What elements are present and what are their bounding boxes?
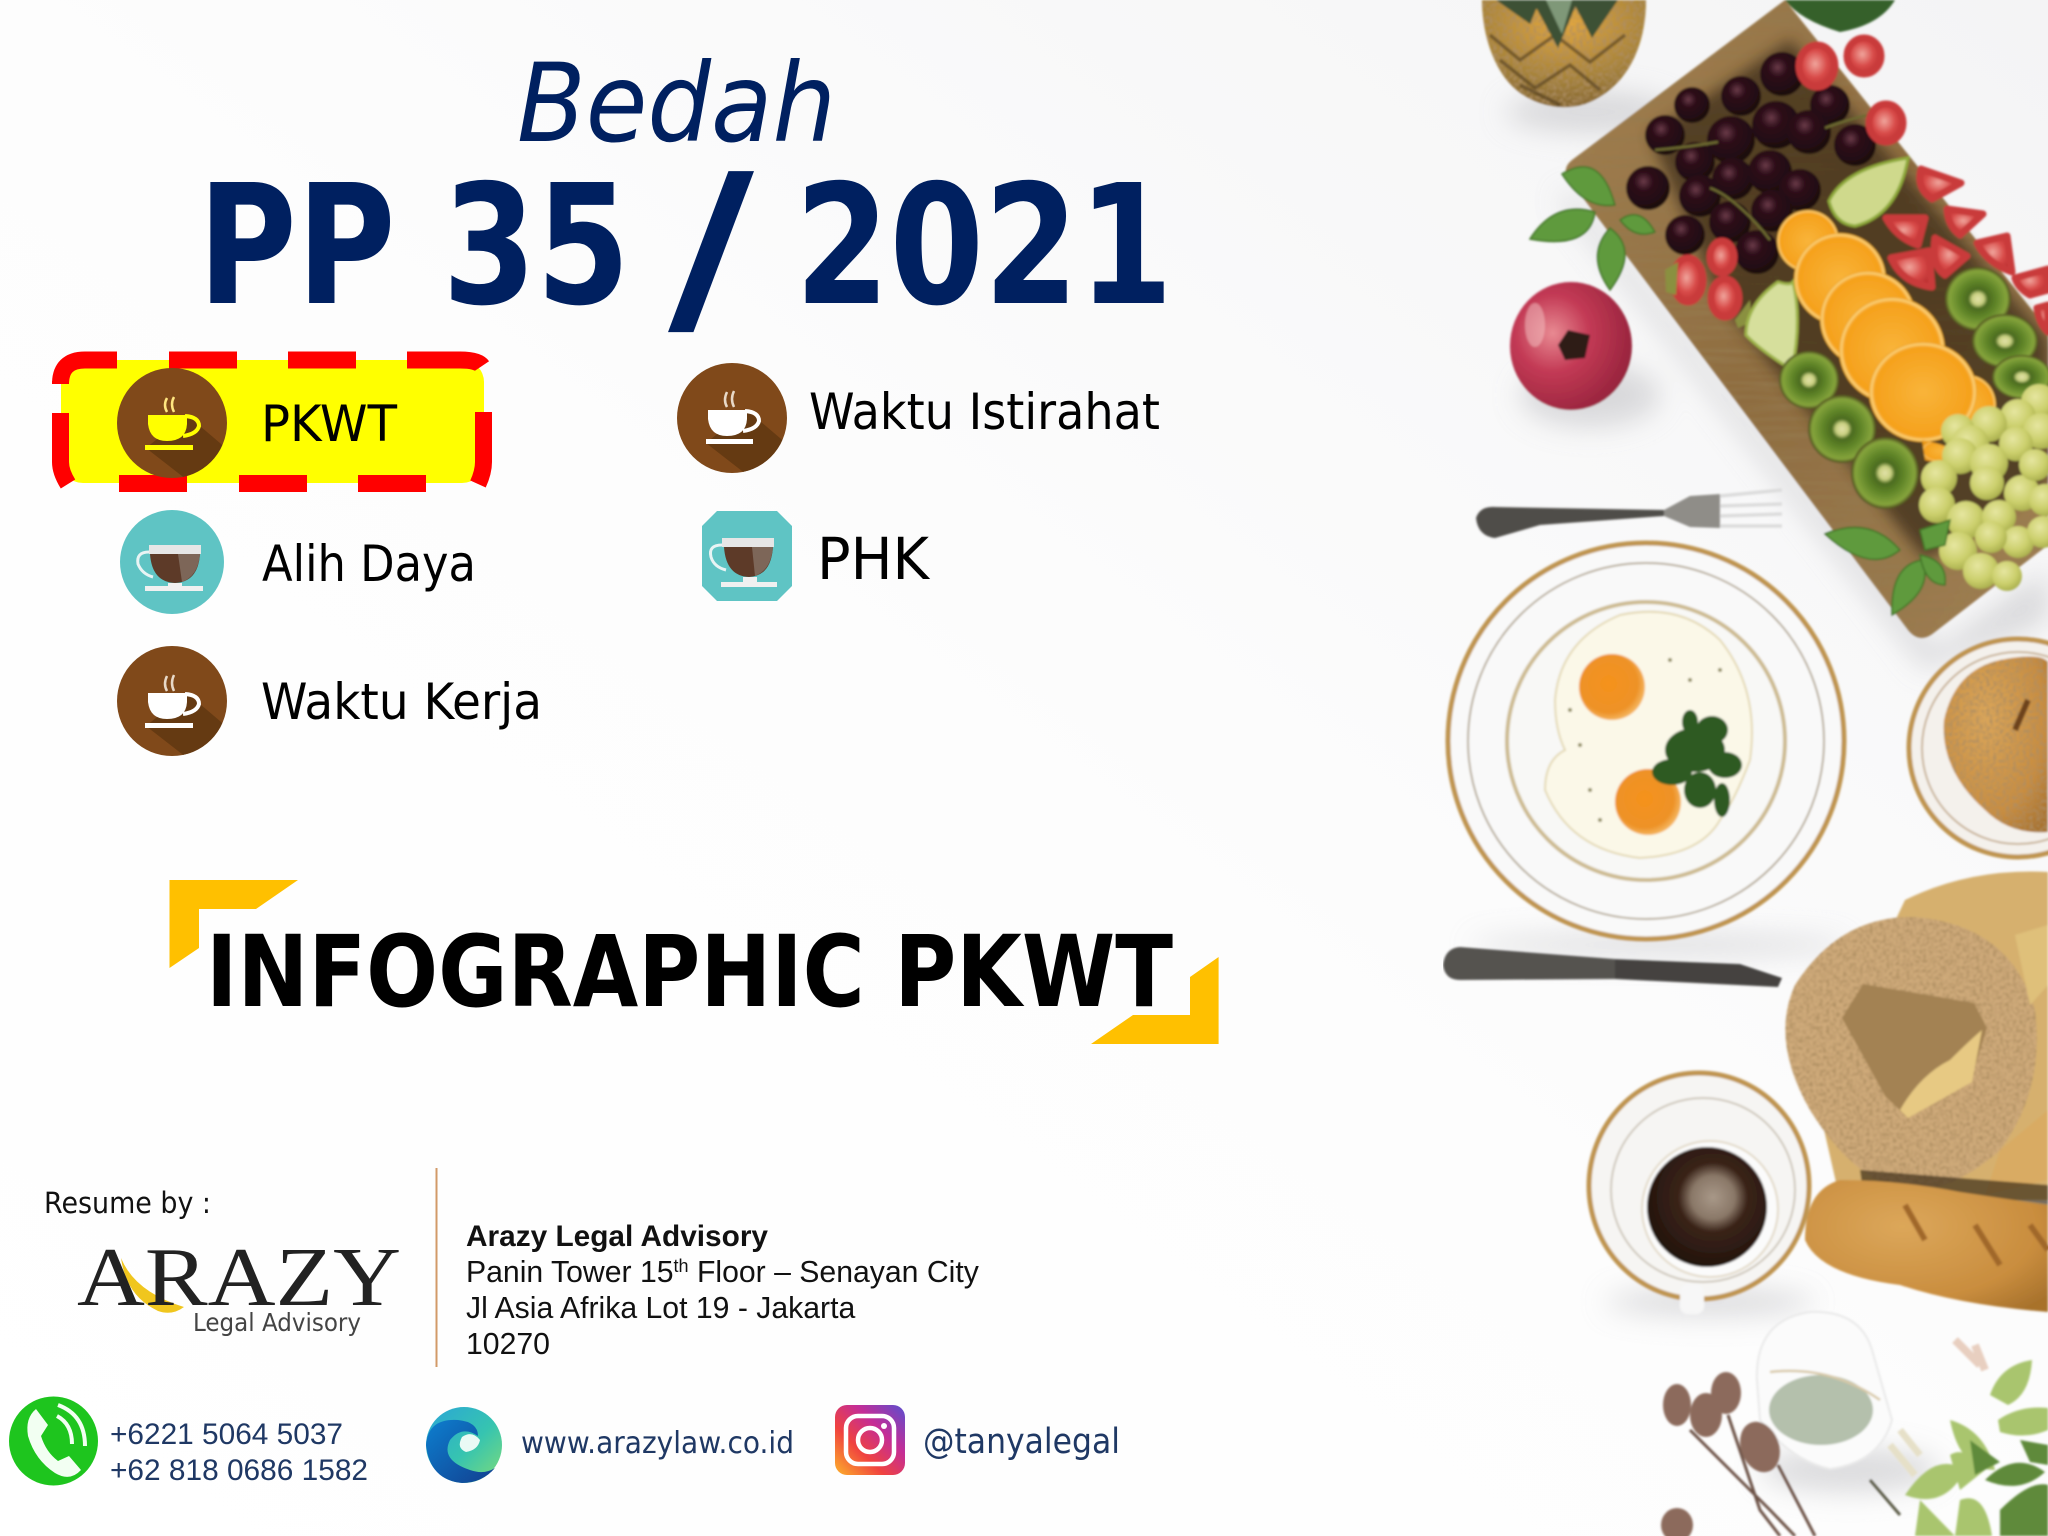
- fork: [1476, 490, 1782, 538]
- icon: brown cup: [677, 363, 787, 473]
- title: PP 35 / 2021: /: [668, 133, 754, 361]
- heading: INFOGRAPHIC PKWT with corner brackets: [170, 880, 1219, 1044]
- fried eggs: [1545, 612, 1752, 858]
- strawberries: [1673, 38, 2048, 332]
- phone numbers: +6221 5064 5037: [110, 1418, 343, 1451]
- title: PP 35 / 2021: [198, 133, 1173, 361]
- icon: brown cup: [117, 646, 227, 756]
- title: PP 35 / 2021: 2021: [795, 150, 1173, 343]
- menu item: PHK: [702, 511, 931, 601]
- text: website: www.arazylaw.co.id: [521, 1426, 794, 1461]
- baguette: [1805, 1170, 2048, 1312]
- bracket: bottom right: [1091, 957, 1219, 1044]
- address block: Floor – Senayan City: [689, 1256, 980, 1289]
- label: PHK: PHK: [817, 525, 931, 593]
- address block: [466, 1220, 980, 1361]
- icon: phone: [9, 1396, 98, 1486]
- egg plate: [1448, 543, 1844, 939]
- menu item: Waktu Kerja: [117, 646, 538, 756]
- menu item: Alih Daya: [120, 510, 476, 614]
- bracket: top left: [170, 880, 298, 968]
- leaves: [1530, 0, 1950, 615]
- knife: [1443, 947, 1782, 987]
- grapes: [1919, 384, 2048, 591]
- logo: Arazy Legal Advisory: ARAZY: [77, 1231, 401, 1324]
- coffee cup and saucer: [1589, 1073, 1809, 1314]
- text: Resume by: Resume by :: [44, 1186, 211, 1220]
- divider: [436, 1168, 438, 1367]
- pineapple: [1482, 0, 1646, 107]
- label: Waktu Kerja: Waktu Kerja: [261, 673, 542, 731]
- label: PKWT: PKWT: [261, 395, 397, 453]
- logo: Arazy Legal Advisory: Legal Advisory: [193, 1308, 361, 1337]
- label: Alih Daya: Alih Daya: [262, 535, 476, 593]
- menu item: PKWT highlighted: [60, 360, 484, 490]
- address block: 10270: [466, 1328, 550, 1361]
- label: Waktu Istirahat: Waktu Istirahat: [809, 383, 1160, 441]
- wooden board: [1566, 0, 2048, 638]
- phone numbers: [110, 1418, 368, 1487]
- icon: instagram: [835, 1405, 905, 1475]
- address block: Arazy Legal Advisory: [466, 1220, 768, 1253]
- phone numbers: +62 818 0686 1582: [110, 1454, 368, 1487]
- food photograph: [1443, 0, 2048, 1536]
- round bread board: [1815, 872, 2048, 1200]
- address block: Jl Asia Afrika Lot 19 - Jakarta: [466, 1292, 855, 1325]
- icon: teal rounded badge with coffee glass: [702, 511, 792, 601]
- croissant plate: [1909, 639, 2048, 857]
- dashed red outline: [60, 360, 484, 484]
- dried pods: [1661, 1372, 1815, 1536]
- text: instagram handle: @tanyalegal: [923, 1422, 1120, 1462]
- heading text: INFOGRAPHIC PKWT: [206, 915, 1173, 1030]
- orange slices: [1777, 210, 1996, 462]
- icon: browser: [426, 1407, 502, 1483]
- lime wedges: [1746, 158, 1908, 370]
- kiwi slices: [1779, 267, 2048, 509]
- green plant: [1870, 1340, 2048, 1536]
- title: PP 35 / 2021: PP 35: [198, 150, 630, 343]
- icon: brown coffee cup with yellow fill: [117, 368, 227, 478]
- milk jug: [1757, 1312, 1892, 1469]
- title: Bedah: Bedah: [517, 40, 836, 167]
- address block: Panin Tower 15: [466, 1256, 674, 1289]
- parsley: [1652, 710, 1742, 817]
- shaded area under fruit: [1650, 40, 2048, 560]
- address block: th: [674, 1256, 689, 1276]
- sesame bagel: [1785, 917, 2048, 1195]
- cherries: [1626, 52, 1876, 274]
- icon: teal circle with coffee glass: [120, 510, 224, 614]
- object shadows: [1470, 92, 2048, 1492]
- pomegranate: [1510, 282, 1632, 410]
- menu item: Waktu Istirahat: [677, 363, 1159, 473]
